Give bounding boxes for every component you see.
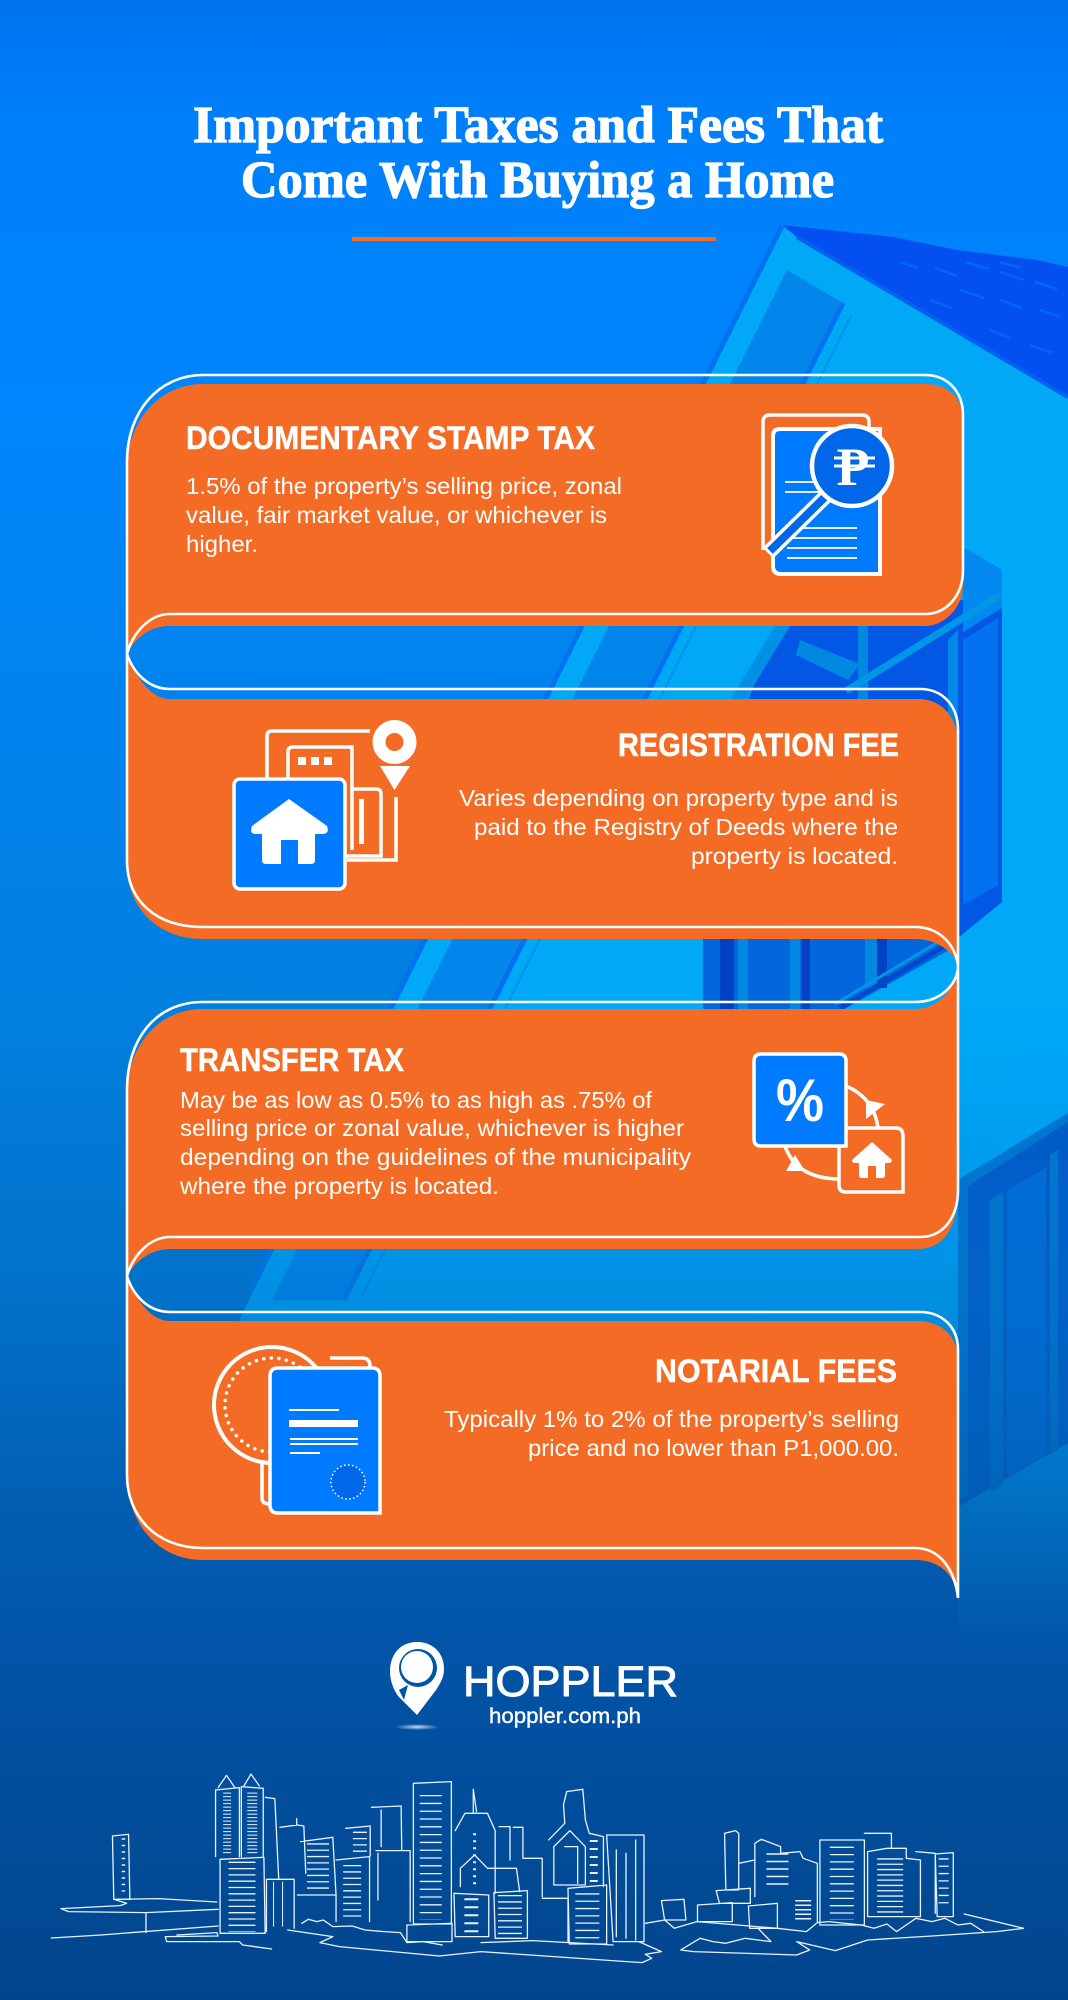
panel text: documentary stamp tax: higher.: [186, 531, 258, 557]
bottom fade overlay: [0, 900, 1068, 2000]
panel text: registration fee: paid to the Registry of Deeds where the: [474, 814, 898, 840]
panel text: documentary stamp tax: value, fair market value, or whichever is: [186, 502, 607, 528]
panel text: registration fee: property is located.: [691, 843, 898, 869]
panel text: transfer tax: depending on the guidelines of the municipality: [180, 1144, 691, 1170]
background house photo: [135, 225, 1068, 1700]
panel text: registration fee: Varies depending on property type and is: [459, 785, 898, 811]
panel text: documentary stamp tax: [186, 420, 622, 557]
logo: hoppler pin: [390, 1642, 444, 1730]
ribbon panels: [127, 375, 963, 1598]
icon: notarized document with seal: [214, 1347, 380, 1513]
title: [193, 97, 884, 209]
panel text: notarial fees: [444, 1353, 899, 1461]
icon: document with peso magnifier: P: [836, 437, 870, 497]
title: Important Taxes and Fees That: [193, 97, 884, 154]
icon: percent and house exchange: [754, 1054, 903, 1192]
panel: notarial fees background: [127, 1276, 958, 1598]
title: Come With Buying a Home: [241, 152, 834, 209]
panel text: notarial fees: price and no lower than P1,000.00.: [528, 1435, 899, 1461]
title underline: [352, 237, 716, 241]
logo: wordmark and url: HOPPLER: [463, 1658, 678, 1706]
panel text: documentary stamp tax: DOCUMENTARY STAMP TAX: [186, 420, 596, 456]
panel: registration fee background: [127, 654, 958, 965]
icon: document with peso magnifier: [763, 415, 892, 574]
panel: documentary stamp tax background: [127, 384, 963, 654]
skyline window dashes: [123, 1793, 944, 1940]
icon: percent and house exchange: %: [776, 1067, 824, 1134]
panel text: registration fee: REGISTRATION FEE: [618, 727, 899, 763]
skyline line drawing: [51, 1774, 1024, 1963]
icon: house documents with map pin: [234, 726, 410, 889]
panel text: documentary stamp tax: 1.5% of the property’s selling price, zonal: [186, 473, 622, 499]
panel text: transfer tax: [179, 1042, 691, 1199]
panel text: notarial fees: Typically 1% to 2% of the property’s selling: [444, 1406, 899, 1432]
ribbon white outline: [127, 375, 963, 1598]
logo: wordmark and url: hoppler.com.ph: [489, 1705, 641, 1728]
skyline shoreline and trees: [51, 1899, 1024, 1963]
panel text: transfer tax: TRANSFER TAX: [180, 1042, 405, 1078]
panel text: transfer tax: May be as low as 0.5% to as high as .75% of: [180, 1087, 652, 1113]
logo: wordmark and url: [463, 1658, 678, 1728]
panel text: registration fee: [459, 727, 899, 869]
panel text: transfer tax: selling price or zonal value, whichever is higher: [180, 1115, 684, 1141]
panel: transfer tax background: [127, 965, 958, 1276]
panel text: transfer tax: where the property is located.: [179, 1173, 499, 1199]
panel text: notarial fees: NOTARIAL FEES: [655, 1353, 897, 1389]
